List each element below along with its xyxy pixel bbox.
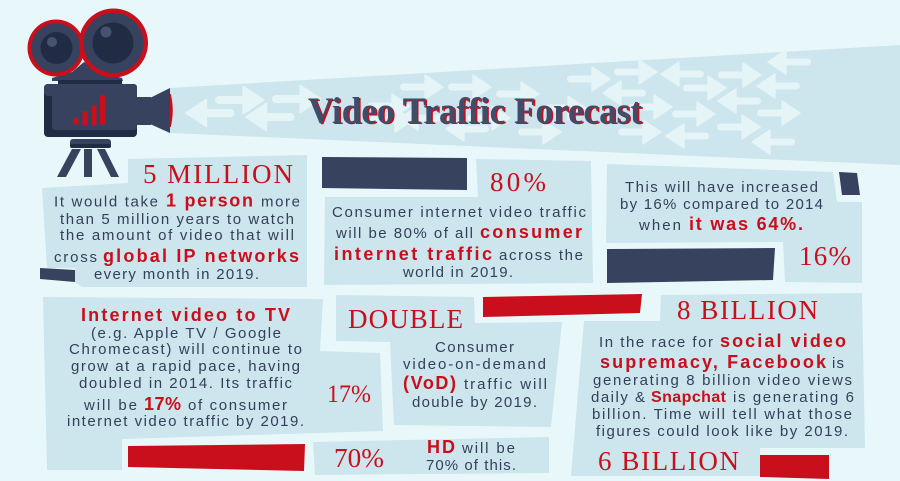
panel: 70% HD [313,437,549,475]
heading: 80% [490,167,546,197]
body text: 17% [144,394,181,414]
body text: it was 64%. [689,214,803,234]
body text: traffic will [464,376,547,393]
heading: 16% [799,241,851,271]
panel: double [336,294,642,427]
accent bar [128,444,305,471]
body text: will be 80% of all [335,225,473,242]
body text: Consumer [435,339,514,356]
body text: Snapchat [651,389,727,406]
accent bar [40,268,75,282]
body text: figures could look like by 2019. [596,423,848,440]
small film reel [28,20,84,76]
panel: internet video to TV [43,297,383,471]
body text: grow at a rapid pace, having [71,358,300,375]
camera body [44,84,137,137]
body text: 1 person [166,190,253,210]
body text: across the [499,247,583,264]
body text: (e.g. Apple TV / Google [91,325,281,342]
heading: 8 BILLION [677,295,818,325]
body text: is [832,355,844,372]
body text: social video [720,331,846,351]
stat: 70% [334,443,384,473]
title: Video Traffic Forecast [308,91,643,132]
body text [591,331,854,440]
body text: internet video traffic by 2019. [67,413,304,430]
body text: is generating 6 [733,389,854,406]
body text: video-on-demand [403,356,546,373]
body text: Consumer internet video traffic [332,204,586,221]
body text: This will have increased [625,179,818,196]
body text: 70% of this. [426,457,516,474]
body text [332,204,586,281]
small accent bar [839,172,860,195]
body text: by 16% compared to 2014 [620,196,823,213]
body text: In the race for [599,334,713,351]
heading: 6 BILLION [598,446,739,476]
tripod [57,139,119,177]
body text: of consumer [188,397,287,414]
large film reel [79,8,148,78]
body text: will be [461,440,515,457]
body text: when [638,217,681,234]
body text: every month in 2019. [94,266,259,283]
body text: double by 2019. [412,394,537,411]
accent bar [322,157,467,190]
panel: 16% [606,164,862,283]
body text [426,437,516,474]
body text: the amount of video that will [60,227,294,244]
body text: billion. Time will tell what those [592,406,852,423]
body text: cross [54,249,97,266]
title: Video Traffic Forecast [310,92,644,133]
body text [67,305,304,430]
body text: Chromecast) will continue to [69,341,302,358]
body text: (VoD) [403,373,456,393]
stat: 17% [327,381,371,408]
body text [620,179,823,234]
body text: will be [83,397,137,414]
accent bar [760,455,829,479]
body text: doubled in 2014. Its traffic [79,375,292,392]
body text: HD [427,437,455,457]
panel: 8 billion and 6 billion [571,293,865,479]
accent bar [483,294,642,317]
large accent bar [607,248,775,283]
body text: generating 8 billion video views [593,372,852,389]
body text: more [261,194,300,210]
body text: consumer [480,222,582,242]
body text: than 5 million years to watch [60,211,294,228]
body text: supremacy, Facebook [600,352,827,372]
body text [403,339,547,411]
body text [54,190,300,283]
panel: 80% [322,157,593,285]
signal bars [74,95,105,125]
panel: 5 million [40,155,307,287]
camera lens [137,88,172,133]
body text: Internet video to TV [81,305,290,325]
body text: global IP networks [103,246,299,266]
body text: world in 2019. [402,264,513,281]
body text: It would take [54,194,158,210]
heading: 5 MILLION [143,159,293,189]
reel neck [52,62,123,81]
heading: DOUBLE [348,304,463,334]
projector light beam with arrows [170,45,900,165]
body text: internet traffic [334,244,492,264]
icon: film camera [28,8,172,177]
body text: daily & [591,389,645,406]
